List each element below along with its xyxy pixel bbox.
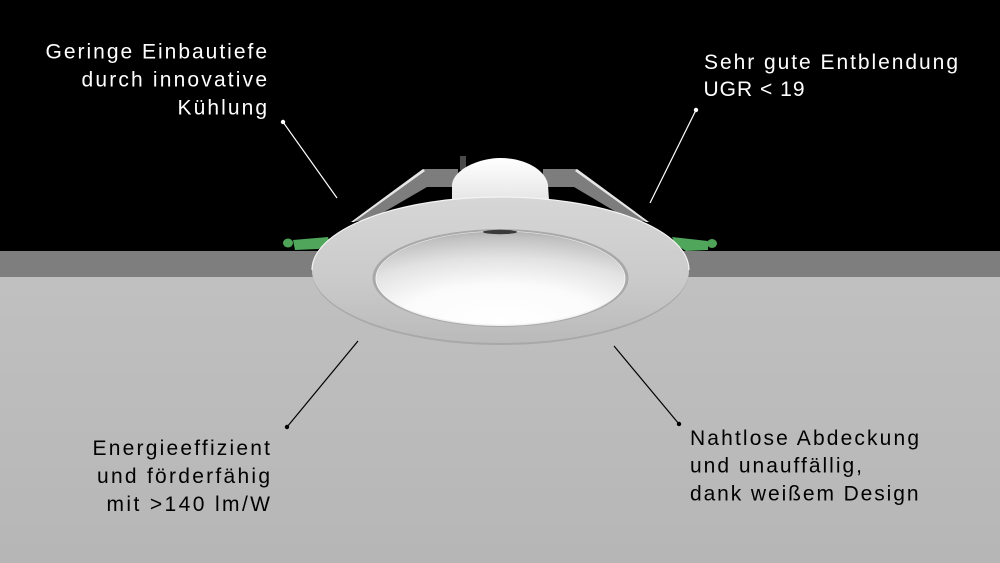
callout: glare control: UGR < 19	[704, 78, 804, 101]
lamp housing dome	[452, 158, 549, 200]
callout: low installation depth: Geringe Einbautiefe	[46, 40, 267, 64]
callout: energy efficiency	[92, 341, 358, 516]
callout: seamless cover: Nahtlose Abdeckung	[690, 427, 919, 450]
callout: low installation depth	[46, 40, 337, 198]
icon: right green spring clip	[672, 237, 717, 251]
callout: glare control: Sehr gute Entblendung	[704, 51, 958, 74]
icon: left green spring clip	[283, 237, 330, 250]
callout: seamless cover: dank weißem Design	[690, 482, 918, 506]
left mounting bracket	[351, 169, 458, 222]
callout: seamless cover	[614, 346, 919, 506]
callout: energy efficiency: mit >140 lm/W	[106, 493, 270, 516]
callout: seamless cover: und unauffällig,	[690, 454, 862, 478]
callout: low installation depth: Kühlung	[178, 96, 267, 120]
trim ring	[312, 197, 689, 345]
ceiling edge band	[0, 251, 1000, 278]
callout: energy efficiency: und förderfähig	[97, 465, 270, 488]
callout: energy efficiency: Energieeffizient	[92, 437, 270, 460]
callout: glare control	[650, 51, 958, 203]
right mounting bracket	[543, 169, 649, 222]
ceiling surface	[0, 277, 1000, 563]
reflector cone	[372, 229, 628, 327]
callout: low installation depth: durch innovative	[82, 68, 267, 92]
icon: screw on housing	[460, 156, 466, 170]
